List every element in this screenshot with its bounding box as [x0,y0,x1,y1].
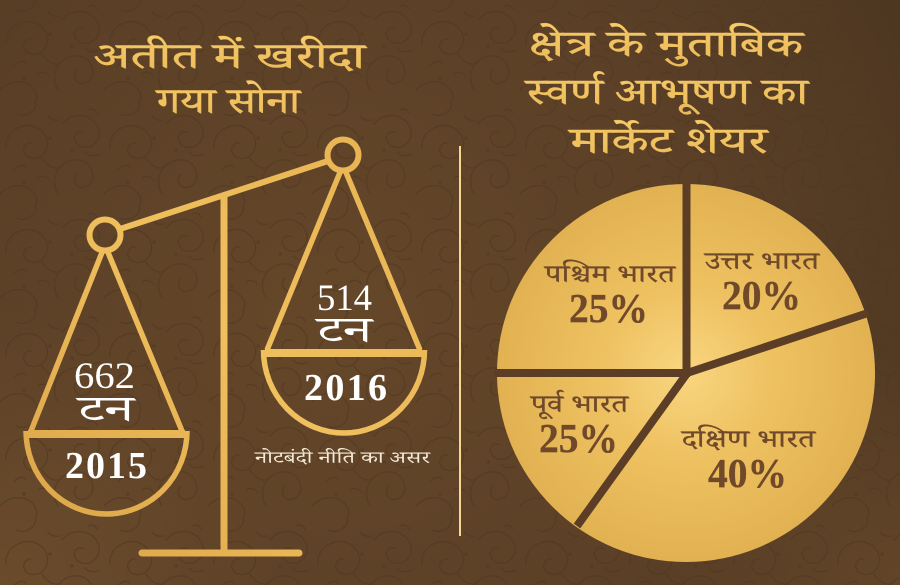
right pivot ring [328,140,358,170]
label: 662 tonnes: 662 [74,356,135,397]
label: 514 tonnes: टन [314,309,375,366]
slice label: east india 25%: 25% [539,415,618,461]
heading: regional market share of gold jewellery: स्वर्ण आभूषण का [523,71,810,128]
label: 514 tonnes: 514 [317,278,372,319]
heading: gold purchased in the past [94,35,368,136]
slice label: south india 40% [681,424,817,496]
slice label: east india 25%: पूर्व भारत [530,389,630,428]
balance scale illustration [26,140,424,553]
divider [459,146,461,536]
heading: regional market share of gold jewellery [523,22,810,177]
slice label: north india 20% [704,246,821,318]
left pivot ring [90,220,120,250]
label: 662 tonnes: टन [75,388,137,445]
heading: gold purchased in the past: अतीत में खरीदा [94,35,368,91]
slice label: north india 20%: 20% [722,272,801,318]
heading: regional market share of gold jewellery: मार्केट शेयर [567,119,770,177]
left pan [26,250,187,514]
scale beam [120,161,328,229]
heading: regional market share of gold jewellery: क्षेत्र के मुताबिक [528,22,805,80]
right pan [264,170,424,433]
slice label: north india 20%: उत्तर भारत [704,246,821,285]
slice label: east india 25% [530,389,630,461]
label: 2016: 2016 [304,367,387,409]
label: 662 tonnes [74,356,137,445]
slice separators [494,180,868,526]
slice label: west india 25%: 25% [569,285,648,331]
slice label: west india 25%: पश्चिम भारत [544,259,677,298]
slice label: south india 40%: दक्षिण भारत [681,424,817,463]
slice label: south india 40%: 40% [708,450,787,496]
pie chart [494,180,875,562]
scale base [142,550,299,556]
heading: gold purchased in the past: गया सोना [155,80,303,136]
scale post [220,196,228,552]
note: effect of demonetisation policy: नोटबंदी नीति का असर [254,447,432,474]
pie disc [497,184,875,562]
slice label: west india 25% [544,259,677,331]
label: 514 tonnes [314,278,375,366]
label: 2015: 2015 [65,445,147,487]
